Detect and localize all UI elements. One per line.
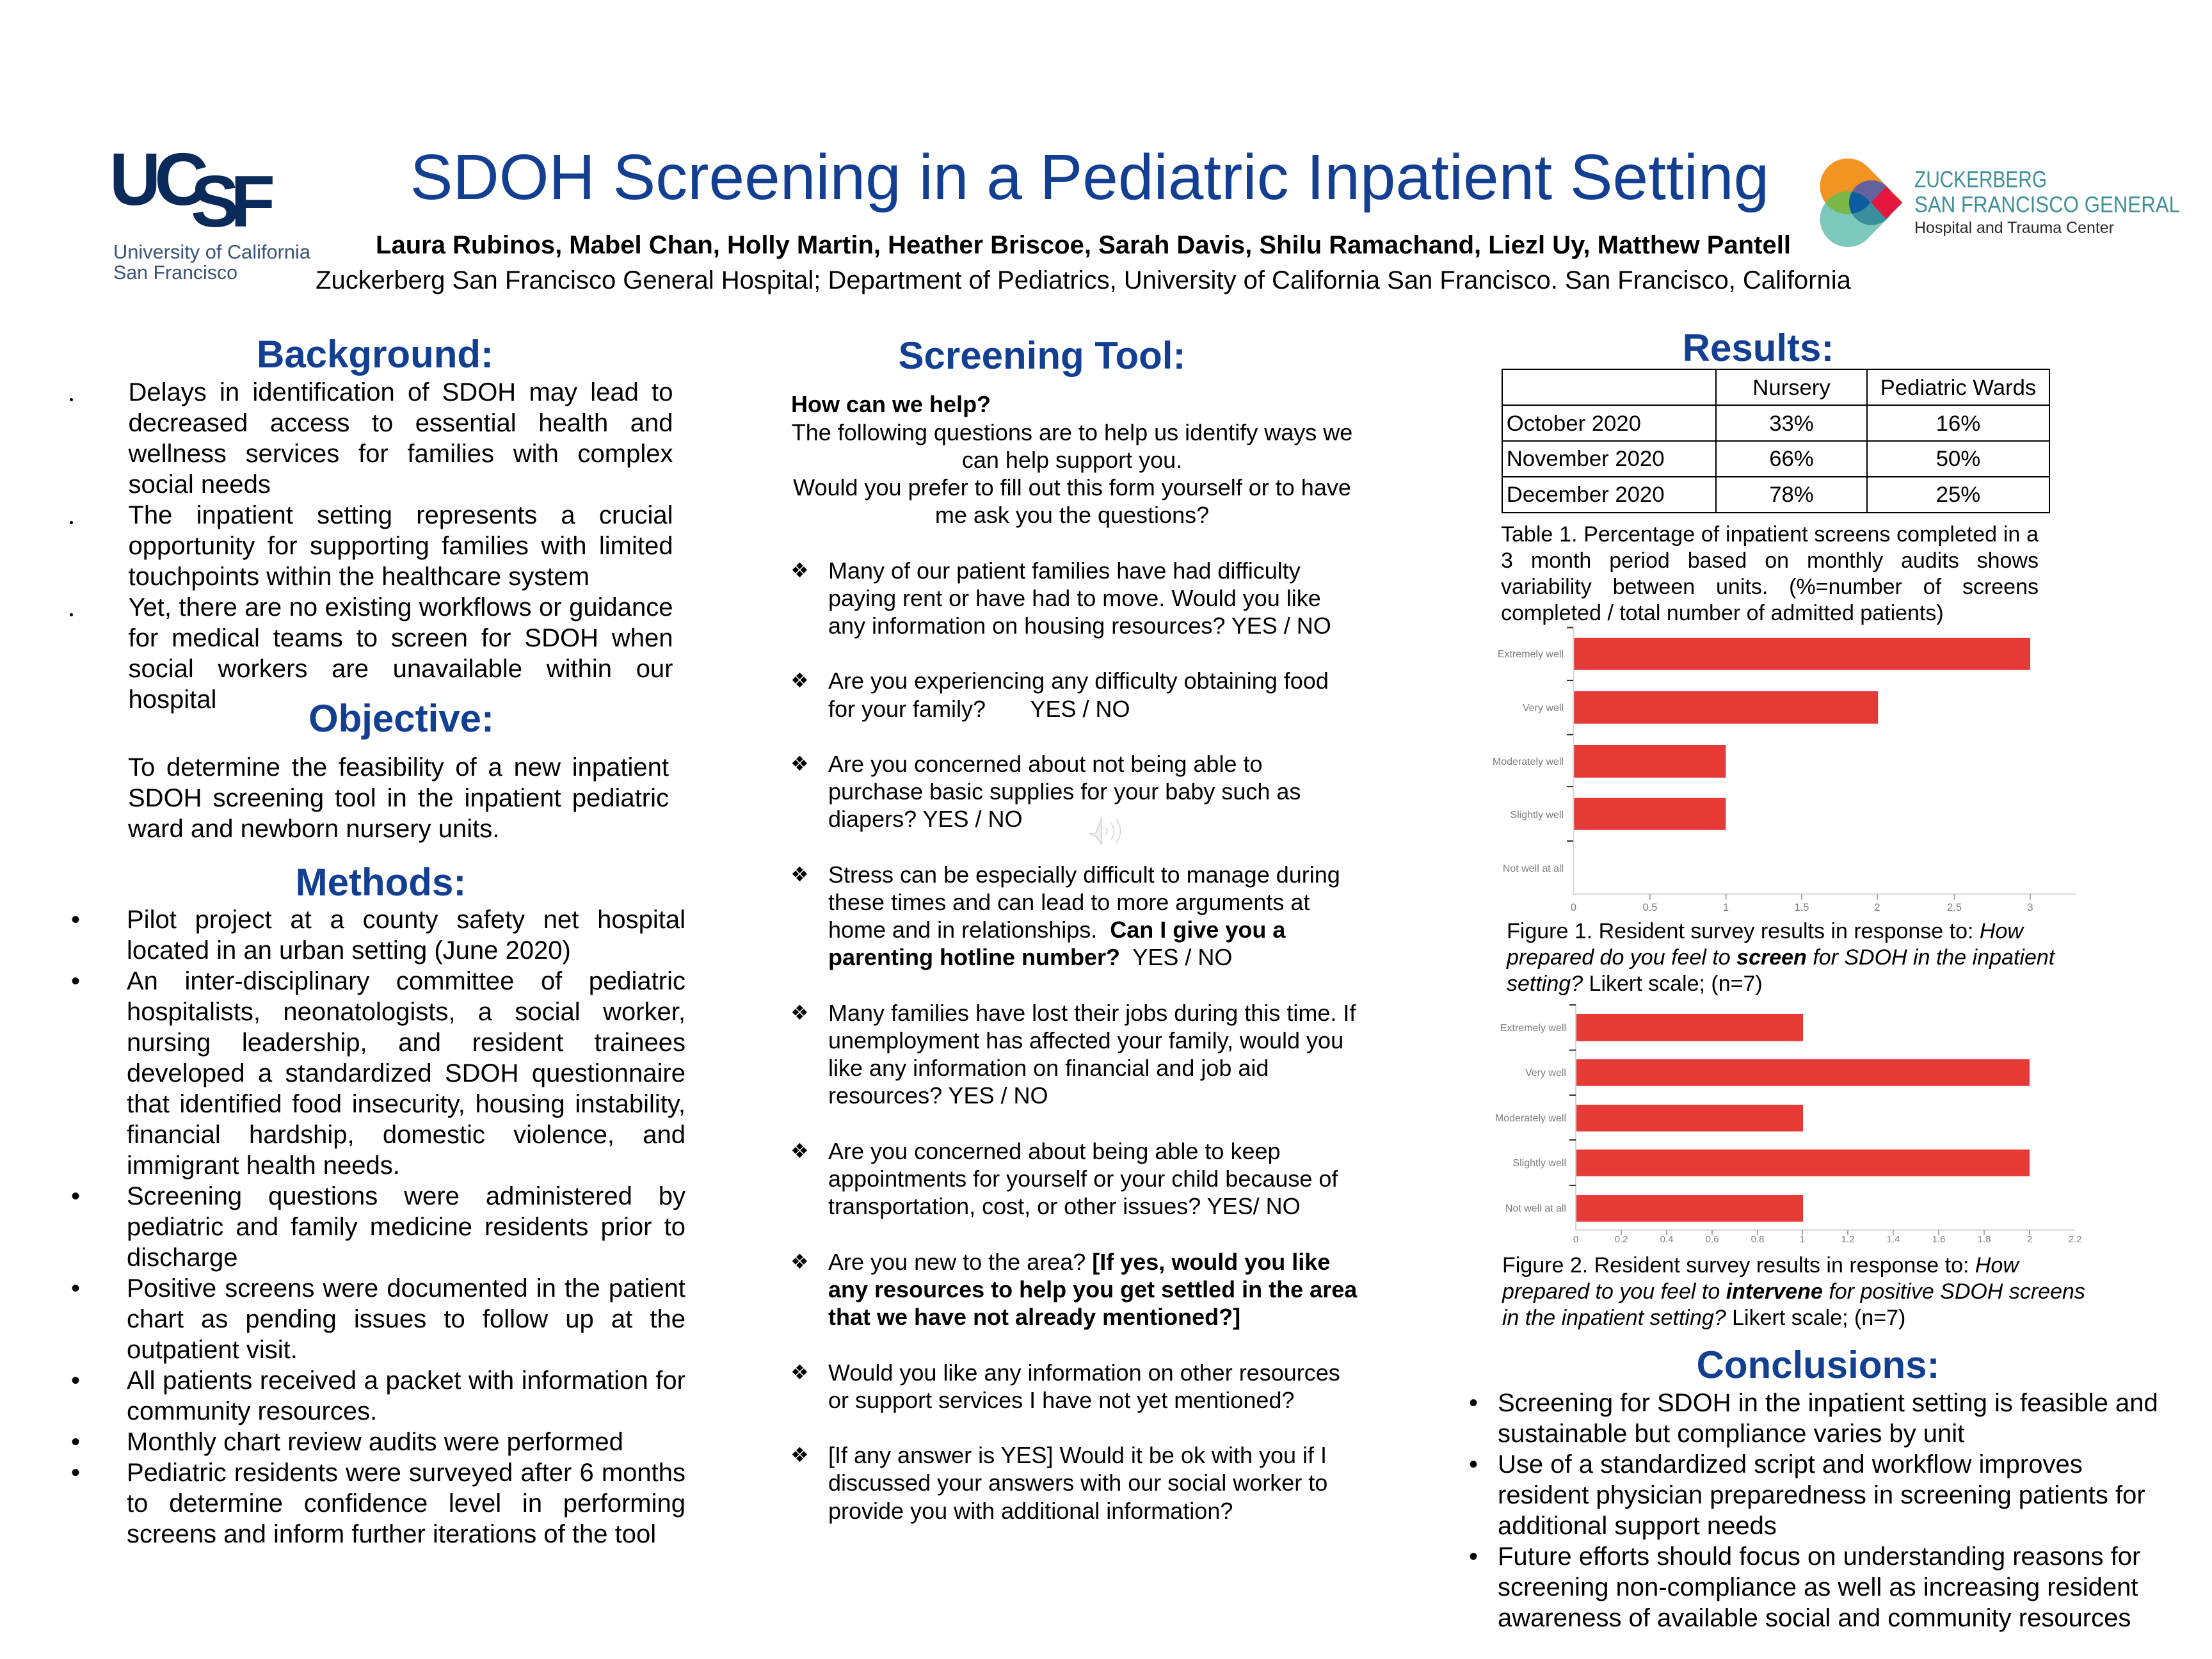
text: objective — [128, 753, 669, 843]
text: methods bullets — [71, 906, 685, 1548]
panel: methods: • — [71, 1428, 80, 1456]
text: background bullets: touchpoints within the healthcare system — [128, 563, 589, 591]
text: screening script: ❖ — [790, 751, 809, 776]
intro: how can we help: The following questions are to help us identify ways we — [792, 419, 1352, 445]
caption: table 1: completed / total number of admitted patients) — [1501, 601, 1944, 625]
table: screening percentages: Pediatric Wards — [1880, 376, 2036, 400]
text: methods bullets: financial hardship, domestic violence, and — [127, 1121, 685, 1149]
questions: any resources to help you get settled in the area — [828, 1276, 1357, 1302]
bar chart: figure 2: Slightly well — [1512, 1158, 1566, 1169]
caption: figure 1: Figure 1. Resident survey results in response to: How — [1507, 919, 2023, 943]
text: methods bullets: immigrant health needs. — [127, 1151, 400, 1180]
bar chart: figure 2: 0.2 — [1615, 1234, 1628, 1245]
text: conclusions bullets — [1469, 1389, 2158, 1632]
questions: diapers? YES / NO — [828, 806, 1023, 832]
questions: Are you experiencing any difficulty obtaining food — [828, 668, 1329, 694]
text: methods bullets: An inter-disciplinary committee of pediatric — [127, 967, 685, 995]
table: screening percentages: 78% — [1769, 483, 1814, 507]
table: screening percentages: Nursery — [1752, 376, 1831, 400]
bar chart: figure 1 — [1493, 627, 2076, 913]
text: background bullets: Delays in identification of SDOH may lead to — [128, 378, 673, 406]
bar chart: figure 2: 1 — [1800, 1234, 1805, 1245]
questions: like any information on financial and job aid — [828, 1055, 1269, 1081]
panel: methods: • — [71, 906, 80, 934]
panel: conclusions: • — [1469, 1389, 1478, 1417]
questions: these times and can lead to more arguments at — [828, 889, 1310, 915]
bar chart: figure 2: 2 — [2027, 1234, 2032, 1245]
bar chart: figure 2: 0.8 — [1751, 1234, 1764, 1245]
panel: conclusions: • — [1469, 1450, 1478, 1479]
caption: figure 1: prepared do you feel to screen for SDOH in the inpatient — [1507, 945, 2055, 970]
caption: table 1: variability between units. (%=number of screens — [1501, 575, 2039, 599]
table: screening percentages: 66% — [1769, 447, 1814, 471]
questions: Many families have lost their jobs during this time. If — [828, 1000, 1356, 1026]
questions: Are you concerned about not being able to — [828, 751, 1262, 777]
questions: that we have not already mentioned?] — [828, 1304, 1240, 1330]
questions: paying rent or have had to move. Would you like — [828, 585, 1321, 611]
bar chart: figure 2: Not well at all — [1505, 1203, 1566, 1214]
caption: figure 2: in the inpatient setting? Likert scale; (n=7) — [1502, 1306, 1905, 1330]
icon: speaker — [1089, 818, 1121, 846]
caption: figure 1 — [1506, 919, 2056, 996]
bar chart: figure 1: Slightly well — [1510, 810, 1564, 821]
questions: [If any answer is YES] Would it be ok with you if I — [828, 1442, 1327, 1468]
text: screening script — [790, 391, 1357, 1524]
bar chart: figure 1: Extremely well — [1498, 649, 1564, 660]
table: screening percentages: 33% — [1769, 412, 1814, 436]
text: methods bullets: screens and inform further iterations of the tool — [127, 1520, 656, 1548]
intro: how can we help: can help support you. — [962, 447, 1182, 473]
questions: home and in relationships. Can I give you a — [828, 917, 1285, 943]
text: methods bullets: Pediatric residents were surveyed after 6 months — [127, 1459, 685, 1487]
bar chart: figure 1: 2 — [1874, 902, 1880, 913]
table: screening percentages: 50% — [1936, 447, 1980, 471]
text: screening script: ❖ — [790, 1000, 809, 1025]
text: background bullets: for medical teams to screen for SDOH when — [128, 624, 673, 652]
text: conclusions bullets: resident physician preparedness in screening patients for — [1498, 1481, 2145, 1509]
questions: transportation, cost, or other issues? YES/ NO — [828, 1193, 1301, 1219]
panel: methods: • — [71, 1459, 80, 1487]
heading: objective: Objective: — [309, 697, 494, 740]
logo: Zuckerberg San Francisco General: ZUCKERBERG — [1914, 166, 2047, 193]
bar chart: figure 1: Not well at all — [1503, 863, 1564, 874]
caption: figure 2: prepared to you feel to intervene for positive SDOH screens — [1502, 1279, 2085, 1304]
panel: screening tool — [790, 334, 1357, 1524]
intro: how can we help — [791, 391, 1352, 528]
text: screening script: ❖ — [790, 1443, 809, 1467]
questions: any information on housing resources? YES / NO — [828, 613, 1331, 639]
text: background bullets: hospital — [128, 685, 216, 714]
table: screening percentages: December 2020 — [1507, 483, 1664, 507]
panel: results — [1493, 326, 2085, 1330]
text: methods bullets: discharge — [127, 1244, 237, 1272]
text: conclusions bullets: sustainable but compliance varies by unit — [1498, 1420, 1964, 1448]
questions: Many of our patient families have had difficulty — [828, 557, 1301, 584]
logo: UCSF — [109, 144, 311, 284]
questions: parenting hotline number? YES / NO — [828, 944, 1232, 970]
text: methods bullets: hospitalists, neonatologists, a social worker, — [127, 998, 685, 1026]
questions — [790, 557, 1357, 1524]
caption: table 1 — [1501, 522, 2039, 625]
text: methods bullets: developed a standardized SDOH questionnaire — [127, 1059, 685, 1087]
bar chart: figure 2: Very well — [1525, 1068, 1566, 1078]
text: methods bullets: Pilot project at a county safety net hospital — [127, 906, 685, 934]
table: screening percentages: November 2020 — [1507, 447, 1664, 471]
bar chart: figure 1: 3 — [2027, 902, 2033, 913]
caption: figure 2: Figure 2. Resident survey results in response to: How — [1502, 1253, 2019, 1278]
text: methods bullets: Screening questions were administered by — [127, 1182, 685, 1210]
text: methods bullets: Positive screens were documented in the patient — [127, 1274, 685, 1302]
logo: UCSF: University of California — [113, 241, 311, 263]
text: background bullets: decreased access to essential health and — [128, 409, 673, 437]
questions: or support services I have not yet mentioned? — [828, 1387, 1294, 1413]
panel: methods — [71, 861, 685, 1548]
logo: UCSF: San Francisco — [113, 261, 237, 284]
panel: methods: • — [71, 1182, 80, 1210]
heading: background: Background: — [257, 333, 493, 376]
text: background bullets: wellness services for families with complex — [128, 440, 673, 468]
text: conclusions bullets: additional support needs — [1498, 1512, 1777, 1540]
text: methods bullets: pediatric and family medicine residents prior to — [127, 1213, 685, 1241]
questions: provide you with additional information? — [828, 1498, 1233, 1524]
panel: methods: • — [71, 967, 80, 995]
text: screening script: ❖ — [790, 862, 809, 886]
text: methods bullets: that identified food insecurity, housing instability, — [127, 1090, 685, 1118]
text: screening script: ❖ — [790, 1139, 809, 1163]
text: background bullets: opportunity for supporting families with limited — [128, 532, 673, 560]
text: background bullets: social needs — [128, 470, 271, 499]
text: screening script: ❖ — [790, 558, 809, 582]
panel: conclusions — [1469, 1343, 2158, 1632]
logo: Zuckerberg San Francisco General — [1820, 159, 2180, 247]
text: methods bullets: Monthly chart review audits were performed — [127, 1428, 623, 1456]
questions: discussed your answers with our social worker to — [828, 1470, 1327, 1496]
authors: Laura Rubinos, Mabel Chan, Holly Martin, Heather Briscoe, Sarah Davis, Shilu Ramachand, Liezl Uy, Matthew Pantell — [376, 231, 1791, 259]
bar chart: figure 2: 1.6 — [1932, 1234, 1945, 1245]
text: objective: SDOH screening tool in the inpatient pediatric — [128, 784, 669, 812]
intro: how can we help: me ask you the questions? — [935, 502, 1209, 528]
text: screening script: ❖ — [790, 1359, 809, 1384]
text: methods bullets: nursing leadership, and resident trainees — [127, 1029, 685, 1057]
bar chart: figure 2: 0 — [1573, 1234, 1578, 1245]
text: conclusions bullets: Future efforts should focus on understanding reasons for — [1498, 1543, 2140, 1571]
bar chart: figure 2 — [1495, 1004, 2081, 1245]
panel: conclusions: • — [1469, 1543, 1478, 1571]
text: methods bullets: All patients received a packet with information for — [127, 1366, 685, 1395]
bar chart: figure 1: 2.5 — [1947, 902, 1962, 913]
table: screening percentages: 16% — [1936, 412, 1980, 436]
questions: Stress can be especially difficult to manage during — [828, 862, 1340, 888]
text: conclusions bullets: Use of a standardized script and workflow improves — [1498, 1450, 2083, 1479]
bar chart: figure 2: 1.4 — [1887, 1234, 1900, 1245]
text: conclusions bullets: Screening for SDOH in the inpatient setting is feasible and — [1498, 1389, 2158, 1417]
table: screening percentages: October 2020 — [1507, 412, 1641, 436]
logo: UCSF: S — [191, 161, 239, 243]
bar chart: figure 2: 1.8 — [1978, 1234, 1991, 1245]
questions: appointments for yourself or your child because of — [828, 1166, 1338, 1192]
bar chart: figure 1: Moderately well — [1493, 757, 1564, 767]
bar chart: figure 2: 0.4 — [1660, 1234, 1673, 1245]
intro: how can we help: How can we help? — [791, 391, 991, 417]
bar chart: figure 2: Extremely well — [1500, 1023, 1566, 1034]
logo: UCSF: F — [230, 161, 275, 243]
text: background bullets: Yet, there are no existing workflows or guidance — [128, 593, 673, 621]
heading: conclusions: Conclusions: — [1696, 1343, 1939, 1386]
bar chart: figure 2: 2.2 — [2069, 1234, 2081, 1245]
heading: results: Results: — [1683, 326, 1834, 369]
caption: figure 2 — [1502, 1253, 2085, 1330]
bar chart: figure 2: 0.6 — [1706, 1234, 1719, 1245]
affiliation: Zuckerberg San Francisco General Hospital; Department of Pediatrics, University of California San Francisco. San Francisco, California — [316, 266, 1851, 294]
questions: for your family? YES / NO — [828, 696, 1130, 722]
bar chart: figure 1: 1.5 — [1795, 902, 1809, 913]
panel: methods: • — [71, 1274, 80, 1302]
text: background bullets: social workers are unavailable within our — [128, 655, 673, 683]
bar chart: figure 1: 0.5 — [1643, 902, 1657, 913]
bar chart: figure 1: 0 — [1571, 902, 1576, 913]
caption: figure 1: setting? Likert scale; (n=7) — [1507, 972, 1763, 996]
text: screening script: ❖ — [790, 1249, 809, 1274]
text: objective: ward and newborn nursery units. — [128, 815, 499, 843]
text: objective: To determine the feasibility of a new inpatient — [128, 753, 669, 781]
panel: objective — [128, 697, 669, 843]
table: screening percentages: 25% — [1936, 483, 1980, 507]
questions: unemployment has affected your family, would you — [828, 1027, 1343, 1054]
questions: purchase basic supplies for your baby such as — [828, 778, 1301, 805]
logo: Zuckerberg San Francisco General: Hospital and Trauma Center — [1914, 219, 2114, 237]
caption: table 1: 3 month period based on monthly audits shows — [1501, 549, 2039, 573]
text: background bullets — [70, 378, 673, 714]
text: methods bullets: community resources. — [127, 1397, 377, 1425]
text: background bullets: The inpatient setting represents a crucial — [128, 501, 673, 529]
bar chart: figure 2: 1.2 — [1841, 1234, 1854, 1245]
questions: Would you like any information on other resources — [828, 1359, 1340, 1385]
text: methods bullets: located in an urban setting (June 2020) — [127, 936, 571, 965]
heading: screening tool: Screening Tool: — [899, 334, 1185, 377]
text: conclusions bullets: awareness of available social and community resources — [1498, 1604, 2131, 1632]
panel: background — [70, 333, 673, 714]
text: methods bullets: chart as pending issues to follow up at the — [127, 1305, 685, 1333]
heading: methods: Methods: — [296, 861, 466, 904]
intro: how can we help: Would you prefer to fill out this form yourself or to have — [793, 474, 1351, 501]
title: SDOH Screening in a Pediatric Inpatient Setting — [410, 141, 1769, 213]
text: methods bullets: to determine confidence level in performing — [127, 1489, 685, 1518]
bar chart: figure 2: Moderately well — [1495, 1113, 1566, 1124]
questions: Are you new to the area? [If yes, would you like — [828, 1249, 1330, 1275]
text: conclusions bullets: screening non-compliance as well as increasing resident — [1498, 1573, 2138, 1601]
questions: Are you concerned about being able to keep — [828, 1138, 1281, 1164]
bar chart: figure 1: Very well — [1523, 703, 1564, 714]
text: screening script: ❖ — [790, 668, 809, 693]
questions: resources? YES / NO — [828, 1082, 1048, 1109]
bar chart: figure 1: 1 — [1723, 902, 1729, 913]
table: screening percentages — [1502, 369, 2050, 513]
text: methods bullets: outpatient visit. — [127, 1336, 298, 1364]
panel: methods: • — [71, 1366, 80, 1395]
caption: table 1: Table 1. Percentage of inpatient screens completed in a — [1501, 522, 2039, 547]
